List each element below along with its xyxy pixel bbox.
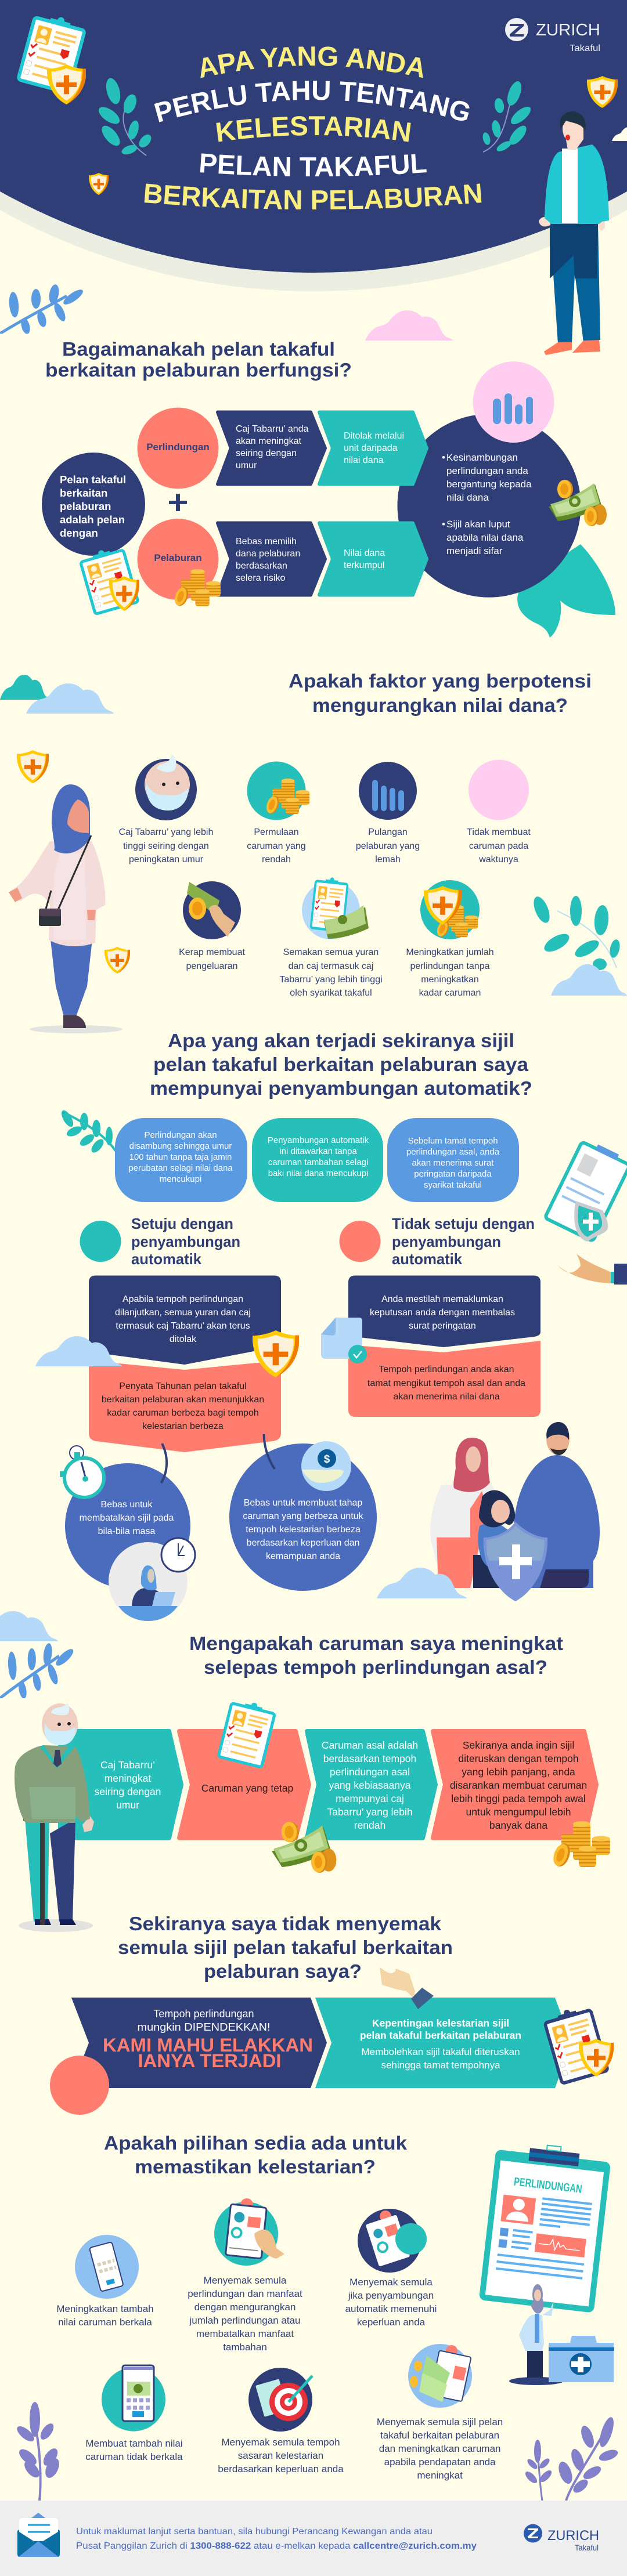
box: notify decision bbox=[348, 1275, 540, 1347]
zurich logo footer bbox=[524, 2524, 599, 2552]
arrow: charges: umur bbox=[236, 461, 257, 471]
factor: review fees: Tabarru’ yang lebih tinggi bbox=[279, 975, 383, 985]
result text: menjadi sifar bbox=[446, 545, 503, 556]
icon: blue branch bbox=[0, 284, 85, 335]
icon: coins bbox=[551, 1821, 610, 1869]
result text: nilai dana bbox=[446, 492, 489, 503]
arrow: free choice: berdasarkan bbox=[236, 561, 287, 571]
icon: cloud bbox=[35, 1336, 122, 1366]
footer bbox=[0, 2501, 627, 2576]
card: reminder letter: syarikat takaful bbox=[424, 1180, 482, 1190]
card: no extra contribution: baki nilai dana mencukupi bbox=[268, 1168, 368, 1178]
icon: right leaves bbox=[481, 79, 534, 153]
icon: certificate clipboard and hand bbox=[545, 1138, 627, 1285]
option: increase contributions: dan meningkatkan caruman bbox=[379, 2443, 500, 2454]
doctor bbox=[509, 2284, 564, 2385]
option: review auto renewal: jika penyambungan bbox=[348, 2290, 434, 2301]
card: reminder letter: perlindungan asal, anda bbox=[406, 1147, 500, 1157]
result text: Sijil akan luput bbox=[446, 519, 510, 530]
box: charges continue: termasuk caj Tabarru’ akan terus bbox=[116, 1321, 250, 1331]
arrow: initial contribution bbox=[307, 1731, 435, 1838]
factor: increase coverage bbox=[406, 880, 494, 998]
card: coverage to age 100 bbox=[115, 1118, 247, 1202]
factor: increase coverage: perlindungan tanpa bbox=[410, 961, 490, 971]
option: ad hoc top-up: Membuat tambah nilai bbox=[85, 2438, 183, 2449]
card: reminder letter: peringatan daripada bbox=[414, 1169, 492, 1179]
protection circle: Perlindungan bbox=[146, 442, 210, 453]
arrow: fund value: terkumpul bbox=[344, 560, 384, 570]
icon: stopwatch bbox=[60, 1446, 104, 1497]
pink circle with bars bbox=[473, 361, 554, 443]
option: reduce coverage bbox=[188, 2198, 302, 2353]
option: reduce coverage: perlindungan dan manfaat bbox=[188, 2288, 302, 2299]
box: annual statement: kelestarian berbeza bbox=[142, 1421, 224, 1431]
investment circle bbox=[137, 519, 218, 600]
option: review target bbox=[218, 2368, 344, 2474]
icon: money bbox=[272, 1822, 336, 1873]
option: reduce coverage: dengan mengurangkan bbox=[194, 2302, 296, 2313]
factor: frequent withdrawals: pengeluaran bbox=[186, 961, 237, 971]
card: coverage to age 100: 100 tahun tanpa taja jamin bbox=[129, 1152, 232, 1162]
factor: late contribution: Tidak membuat bbox=[467, 827, 531, 837]
icon: left leaves bbox=[96, 77, 153, 156]
option: ad hoc top-up bbox=[85, 2365, 183, 2462]
panel: agree flow bbox=[35, 1275, 377, 1621]
heading: auto renewal: mempunyai penyambungan automatik? bbox=[150, 1077, 532, 1099]
arrow: shortened coverage: mungkin DIPENDEKKAN! bbox=[137, 2021, 271, 2033]
card: coverage to age 100: perubatan selagi nilai dana bbox=[128, 1163, 233, 1173]
flexible contribution circle: tempoh kelestarian berbeza bbox=[246, 1525, 361, 1535]
result text bbox=[442, 452, 532, 556]
arrow: longer term: yang lebih panjang, anda bbox=[462, 1766, 575, 1778]
box: annual statement: kadar caruman berbeza bagi tempoh bbox=[107, 1408, 259, 1418]
panel: options bbox=[56, 2198, 503, 2481]
factor: review fees: oleh syarikat takaful bbox=[290, 988, 372, 998]
arrow: longer term bbox=[433, 1731, 596, 1838]
cancel circle: bila-bila masa bbox=[98, 1526, 155, 1536]
arrow: free choice: Bebas memilih bbox=[236, 537, 297, 547]
heading: no review bbox=[118, 1913, 453, 1982]
factor: low initial contribution: rendah bbox=[262, 855, 291, 864]
flexible contribution circle: kemampuan anda bbox=[266, 1551, 340, 1561]
flexible contribution circle: Bebas untuk membuat tahap bbox=[244, 1498, 362, 1508]
arrow: fixed contribution bbox=[179, 1731, 309, 1838]
icon: shield right bbox=[587, 76, 618, 108]
arrow: free choice bbox=[218, 523, 325, 595]
box: fund value: tamat mengikut tempoh asal dan anda bbox=[367, 1379, 525, 1388]
factor: late contribution: waktunya bbox=[478, 855, 518, 864]
arrow: deducted bbox=[319, 412, 427, 484]
result text: Kesinambungan bbox=[446, 452, 518, 463]
option: agree: Setuju dengan bbox=[131, 1215, 233, 1232]
cancel circle bbox=[65, 1463, 190, 1589]
contact text: Pusat Panggilan Zurich di 1300-888-622 atau e-melkan kepada callcentre@zurich.com.my bbox=[76, 2541, 477, 2551]
icon: small shield bbox=[89, 173, 109, 195]
title: BERKAITAN PELABURAN bbox=[144, 183, 482, 209]
icon: woman at laptop bbox=[109, 1538, 195, 1621]
result text: • bbox=[442, 519, 445, 530]
arrow: initial contribution: perlindungan asal bbox=[330, 1766, 410, 1778]
investment circle: Pelaburan bbox=[154, 552, 202, 563]
icon: navy clipboard with shield bbox=[543, 2003, 614, 2083]
option: review auto renewal bbox=[345, 2209, 437, 2328]
icon: envelope bbox=[17, 2513, 60, 2557]
arrow: longer term: lebih tinggi pada tempoh awal bbox=[451, 1793, 586, 1804]
option: increase contributions: Menyemak semula sijil pelan bbox=[377, 2416, 503, 2427]
heading: auto renewal bbox=[150, 1030, 532, 1099]
icon: cloud and blue branch bbox=[0, 1611, 75, 1700]
heading: how it works bbox=[45, 338, 352, 381]
option: review target: sasaran kelestarian bbox=[238, 2450, 323, 2461]
protection circle bbox=[137, 407, 218, 489]
arrow: charges: akan meningkat bbox=[236, 436, 302, 446]
arrow: fund value: Nilai dana bbox=[344, 548, 385, 558]
figure: old man with cane bbox=[15, 1702, 94, 1932]
factor: higher tabarru: Caj Tabarru’ yang lebih bbox=[119, 827, 213, 837]
option: review auto renewal: keperluan anda bbox=[357, 2317, 426, 2328]
panel: contribution flow bbox=[60, 1698, 610, 1873]
card: no extra contribution: ini ditawarkan tanpa bbox=[279, 1146, 357, 1156]
icon: clipboard with shield bbox=[18, 10, 87, 104]
icon: purple plants right bbox=[524, 2416, 619, 2501]
arrow: deducted: nilai dana bbox=[344, 455, 384, 465]
icon: coins bbox=[172, 569, 221, 607]
box: fund value bbox=[348, 1341, 540, 1417]
flexible contribution circle: berdasarkan keperluan dan bbox=[247, 1538, 359, 1548]
heading: factors: Apakah faktor yang berpotensi bbox=[289, 670, 592, 692]
contact text: Untuk maklumat lanjut serta bantuan, sila hubungi Perancang Kewangan anda atau bbox=[76, 2527, 433, 2537]
arrow: longer term: diteruskan dengan tempoh bbox=[458, 1753, 579, 1764]
panel: how it works flow bbox=[42, 361, 615, 638]
option: review auto renewal: automatik memenuhi bbox=[345, 2303, 437, 2314]
result circle bbox=[397, 414, 581, 598]
factor: higher tabarru: tinggi seiring dengan bbox=[123, 841, 209, 851]
heading: contribution increase bbox=[189, 1633, 563, 1678]
flexible contribution circle bbox=[229, 1443, 377, 1591]
arrow: importance of sustainability: sehingga tamat tempohnya bbox=[381, 2060, 500, 2071]
factor: weak returns: lemah bbox=[375, 855, 401, 864]
decorative teal leaves bbox=[517, 544, 615, 638]
flexible contribution circle: caruman yang berbeza untuk bbox=[243, 1511, 364, 1521]
box: charges continue bbox=[89, 1275, 281, 1365]
arrow: deducted: Ditolak melalui bbox=[344, 431, 404, 441]
option: reduce coverage: jumlah perlindungan atau bbox=[189, 2315, 300, 2326]
option: increase contributions: apabila pendapatan anda bbox=[384, 2456, 496, 2468]
result text: • bbox=[442, 452, 445, 463]
box: notify decision: surat peringatan bbox=[409, 1321, 476, 1331]
title: KELESTARIAN bbox=[216, 116, 411, 142]
box: charges continue: ditolak bbox=[170, 1334, 197, 1344]
intro circle: adalah pelan bbox=[60, 513, 125, 526]
icon: clipboard bbox=[79, 544, 139, 614]
box: notify decision: Anda mestilah memaklumkan bbox=[381, 1294, 503, 1304]
option: disagree: automatik bbox=[392, 1250, 463, 1268]
heading: options: Apakah pilihan sedia ada untuk bbox=[104, 2132, 408, 2154]
arrow: fixed contribution: Caruman yang tetap bbox=[201, 1782, 293, 1794]
option: agree: automatik bbox=[131, 1250, 202, 1268]
factor: frequent withdrawals: Kerap membuat bbox=[179, 947, 245, 957]
heading: contribution increase: Mengapakah caruman saya meningkat bbox=[189, 1633, 563, 1654]
card: reminder letter bbox=[387, 1118, 519, 1202]
arrow: longer term: untuk mengumpul lebih bbox=[466, 1806, 571, 1818]
factor: weak returns: pelaburan yang bbox=[356, 841, 420, 851]
coral circle bbox=[50, 2056, 109, 2115]
arrow: charges: seiring dengan bbox=[236, 448, 297, 458]
intro circle bbox=[42, 453, 145, 556]
panel: disagree flow bbox=[321, 1275, 540, 1417]
header banner bbox=[0, 0, 627, 291]
arrow: longer term: Sekiranya anda ingin sijil bbox=[463, 1739, 574, 1751]
option: ad hoc top-up: caruman tidak berkala bbox=[85, 2451, 183, 2462]
option: increase contributions: meningkat bbox=[417, 2470, 463, 2481]
arrow: tabarru increases bbox=[60, 1731, 181, 1838]
factor: higher tabarru: peningkatan umur bbox=[129, 855, 204, 864]
card: coverage to age 100: disambung sehingga umur bbox=[129, 1141, 232, 1151]
heading: no review: semula sijil pelan takaful berkaitan bbox=[118, 1937, 453, 1958]
icon: clipboard bbox=[218, 1698, 276, 1767]
arrow: tabarru increases: umur bbox=[116, 1799, 139, 1811]
icon: hand with dollar bbox=[301, 1441, 351, 1491]
option: agree: penyambungan bbox=[131, 1233, 240, 1250]
option: regular top-up: Meningkatkan tambah bbox=[56, 2303, 154, 2314]
card: reminder letter: Sebelum tamat tempoh bbox=[408, 1136, 498, 1146]
title: PELAN TAKAFUL bbox=[200, 153, 427, 176]
option: review auto renewal: Menyemak semula bbox=[349, 2277, 433, 2288]
factor: increase coverage: meningkatkan bbox=[421, 975, 479, 985]
arrow: tabarru increases: seiring dengan bbox=[95, 1786, 161, 1797]
zurich logo footer: Takaful bbox=[575, 2543, 599, 2552]
arrow: shortened coverage: Tempoh perlindungan bbox=[153, 2008, 254, 2020]
card: no extra contribution bbox=[252, 1118, 383, 1202]
result text: bergantung kepada bbox=[446, 479, 532, 490]
arrow: tabarru increases: Caj Tabarru’ bbox=[100, 1759, 155, 1771]
title: APA YANG ANDA bbox=[200, 46, 423, 78]
cancel circle: membatalkan sijil pada bbox=[80, 1513, 174, 1523]
intro circle: Pelan takaful bbox=[60, 473, 126, 486]
cloud at right edge bbox=[612, 127, 627, 141]
arrow: longer term: banyak dana bbox=[489, 1819, 547, 1831]
result text: apabila nilai dana bbox=[446, 532, 524, 543]
option: increase contributions: takaful berkaitan pelaburan bbox=[380, 2430, 499, 2441]
box: charges continue: dilanjutkan, semua yuran dan caj bbox=[115, 1308, 251, 1318]
zurich logo bbox=[505, 18, 600, 53]
factor: review fees: dan caj termasuk caj bbox=[289, 961, 373, 971]
arrow: initial contribution: yang kebiasaanya bbox=[329, 1779, 411, 1791]
heading: auto renewal: Apa yang akan terjadi sekiranya sijil bbox=[168, 1030, 514, 1051]
heading: factors: mengurangkan nilai dana? bbox=[312, 694, 568, 716]
box: charges continue: Apabila tempoh perlindungan bbox=[122, 1294, 243, 1304]
factor: low initial contribution: Permulaan bbox=[254, 827, 299, 837]
icon: letter with check bbox=[321, 1318, 367, 1363]
option: disagree bbox=[339, 1215, 535, 1268]
panel: consequences bbox=[50, 1967, 614, 2115]
heading: how it works: Bagaimanakah pelan takaful bbox=[62, 338, 335, 360]
medical kit bbox=[549, 2336, 614, 2382]
arrow: initial contribution: Tabarru’ yang lebih bbox=[327, 1806, 413, 1818]
option: agree bbox=[80, 1215, 240, 1268]
icon: shield bbox=[253, 1330, 299, 1377]
arrow: longer term: disarankan membuat caruman bbox=[450, 1779, 587, 1791]
factor: low initial contribution: caruman yang bbox=[247, 841, 306, 851]
factor: increase coverage: Meningkatkan jumlah bbox=[406, 947, 494, 957]
intro circle: berkaitan bbox=[60, 487, 107, 499]
factor: late contribution: caruman pada bbox=[469, 841, 528, 851]
option: increase contributions bbox=[377, 2344, 503, 2481]
arrow: charges: Caj Tabarru’ anda bbox=[236, 424, 309, 434]
document bbox=[480, 2140, 611, 2311]
option: reduce coverage: tambahan bbox=[223, 2342, 267, 2353]
connector bbox=[161, 1443, 167, 1483]
icon: pink cloud bbox=[365, 310, 453, 341]
intro circle: pelaburan bbox=[60, 500, 111, 512]
arrow: initial contribution: Caruman asal adalah bbox=[322, 1739, 418, 1751]
arrow: importance of sustainability: Kepentingan kelestarian sijil bbox=[372, 2017, 509, 2029]
icon: pointing hand bbox=[380, 1967, 434, 2009]
option: regular top-up: nilai caruman berkala bbox=[58, 2317, 152, 2328]
heading: no review: pelaburan saya? bbox=[204, 1960, 362, 1982]
arrow: importance of sustainability bbox=[315, 1998, 572, 2088]
factor: higher tabarru bbox=[119, 754, 213, 864]
illustration: protection document bbox=[480, 2140, 614, 2385]
factor: frequent withdrawals bbox=[179, 881, 245, 971]
box: fund value: Tempoh perlindungan anda akan bbox=[379, 1365, 514, 1374]
box: notify decision: keputusan anda dengan membalas bbox=[370, 1308, 515, 1318]
heading: factors bbox=[289, 670, 592, 716]
document: PERLINDUNGAN bbox=[513, 2176, 583, 2196]
figure: family with shield bbox=[430, 1422, 600, 1601]
heading: options: memastikan kelestarian? bbox=[135, 2156, 376, 2177]
arrow: tabarru increases: meningkat bbox=[105, 1772, 152, 1784]
zurich logo: Takaful bbox=[570, 44, 600, 53]
factor: late contribution bbox=[467, 760, 531, 864]
arrow: shortened coverage: KAMI MAHU ELAKKAN bbox=[103, 2035, 313, 2056]
icon: purple plant left bbox=[15, 2402, 62, 2501]
arrow: free choice: dana pelaburan bbox=[236, 549, 300, 559]
contact text bbox=[76, 2527, 477, 2551]
factor: weak returns: Pulangan bbox=[368, 827, 408, 837]
icon: teal plant with cloud bbox=[531, 895, 627, 996]
card: coverage to age 100: Perlindungan akan bbox=[144, 1130, 217, 1140]
icon: hand with dollar: $ bbox=[324, 1453, 330, 1466]
card: reminder letter: akan menerima surat bbox=[412, 1158, 494, 1168]
panel: factors row one bbox=[119, 754, 531, 864]
option: disagree: Tidak setuju dengan bbox=[392, 1215, 535, 1232]
card: coverage to age 100: mencukupi bbox=[160, 1174, 201, 1184]
heading: how it works: berkaitan pelaburan berfungsi? bbox=[45, 359, 352, 381]
box: annual statement: Penyata Tahunan pelan takaful bbox=[119, 1381, 247, 1391]
panel: renewal facts bbox=[115, 1118, 519, 1202]
connector bbox=[264, 1434, 275, 1469]
plus sign bbox=[169, 494, 187, 511]
option: reduce coverage: membatalkan manfaat bbox=[196, 2328, 294, 2339]
arrow: initial contribution: mempunyai caj bbox=[336, 1793, 404, 1804]
intro circle: dengan bbox=[60, 527, 98, 539]
option: reduce coverage: Menyemak semula bbox=[204, 2275, 287, 2286]
arrow: charges bbox=[218, 412, 325, 484]
box: fund value: akan menerima nilai dana bbox=[393, 1392, 500, 1402]
panel: factors row two bbox=[179, 876, 494, 998]
box: annual statement bbox=[89, 1361, 281, 1452]
arrow: deducted: unit daripada bbox=[344, 443, 398, 453]
icon: cloud by family bbox=[377, 1568, 467, 1598]
icon: teal branch bbox=[59, 1109, 116, 1155]
heading: contribution increase: selepas tempoh perlindungan asal? bbox=[204, 1656, 547, 1678]
title bbox=[144, 46, 482, 209]
clouds bbox=[0, 675, 114, 714]
arrow: free choice: selera risiko bbox=[236, 573, 285, 583]
arrow: importance of sustainability: Membolehkan sijil takaful diteruskan bbox=[361, 2046, 520, 2057]
heading: no review: Sekiranya saya tidak menyemak bbox=[129, 1913, 442, 1934]
card: no extra contribution: caruman tambahan selagi bbox=[268, 1157, 368, 1167]
factor: increase coverage: kadar caruman bbox=[419, 988, 481, 998]
zurich logo footer: ZURICH bbox=[547, 2528, 599, 2544]
card: no extra contribution: Penyambungan automatik bbox=[268, 1135, 369, 1145]
heading: auto renewal: pelan takaful berkaitan pelaburan saya bbox=[153, 1054, 529, 1075]
result text: perlindungan anda bbox=[446, 465, 528, 476]
factor: weak returns bbox=[356, 762, 420, 864]
arrow: importance of sustainability: pelan takaful berkaitan pelaburan bbox=[360, 2029, 521, 2041]
arrow: shortened coverage: IANYA TERJADI bbox=[138, 2050, 281, 2071]
icon: shields near woman bbox=[17, 750, 130, 974]
option: review target: Menyemak semula tempoh bbox=[221, 2437, 340, 2448]
arrow: shortened coverage bbox=[71, 1998, 327, 2088]
factor: low initial contribution bbox=[247, 761, 309, 864]
factor: review fees: Semakan semua yuran bbox=[283, 947, 379, 957]
cancel circle: Bebas untuk bbox=[101, 1500, 153, 1510]
zurich logo: ZURICH bbox=[536, 21, 600, 39]
option: disagree: penyambungan bbox=[392, 1233, 501, 1250]
option: review target: berdasarkan keperluan anda bbox=[218, 2463, 344, 2474]
arrow: initial contribution: berdasarkan tempoh bbox=[323, 1753, 416, 1764]
arrow: initial contribution: rendah bbox=[354, 1819, 385, 1831]
factor: review fees bbox=[279, 876, 383, 998]
title: PERLU TAHU TENTANG bbox=[154, 81, 470, 122]
box: annual statement: berkaitan pelaburan akan menunjukkan bbox=[102, 1395, 264, 1405]
option: regular top-up bbox=[56, 2235, 154, 2328]
figure: woman in hijab bbox=[9, 784, 122, 1033]
heading: options bbox=[104, 2132, 408, 2177]
icon: money bbox=[549, 480, 607, 526]
arrow: fund value bbox=[319, 523, 427, 595]
figure: standing man bbox=[539, 111, 609, 355]
